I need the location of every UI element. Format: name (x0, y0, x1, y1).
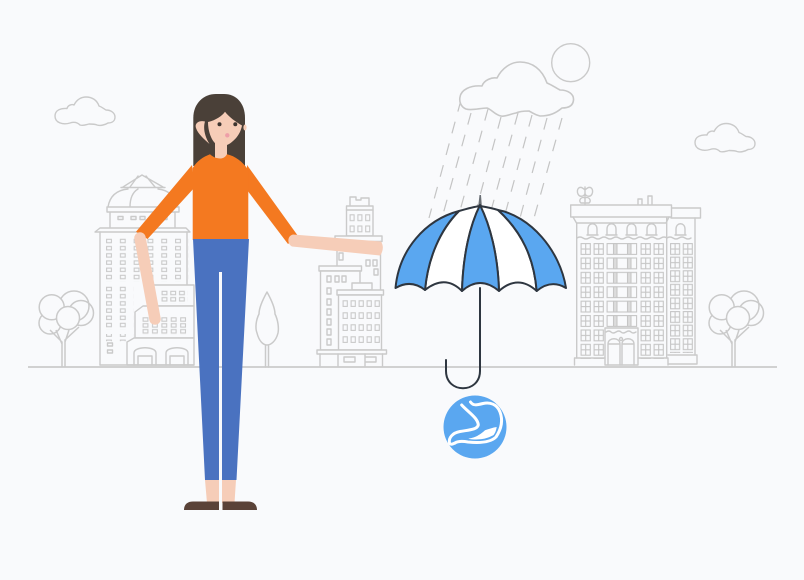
trousers (193, 239, 249, 480)
right upper arm (247, 165, 298, 244)
sweater (193, 154, 248, 240)
arched doors (134, 348, 188, 365)
face (208, 112, 242, 146)
window grids (580, 243, 604, 359)
rain (429, 100, 562, 218)
hair (193, 94, 245, 166)
ear (196, 121, 210, 144)
main tower (95, 228, 190, 232)
right building (571, 187, 700, 365)
handle (446, 288, 480, 388)
left small cloud (55, 97, 115, 125)
entrance (605, 328, 638, 365)
left forearm (140, 238, 155, 319)
dome (107, 175, 179, 227)
umbrella (396, 195, 566, 388)
arched windows (587, 224, 686, 235)
annex (153, 285, 194, 306)
shoes (184, 502, 257, 510)
neck (215, 135, 227, 159)
base (574, 355, 697, 365)
right small cloud (695, 124, 755, 152)
left building (95, 175, 194, 365)
center building (317, 197, 386, 366)
legs (205, 480, 236, 503)
roof ornament (577, 187, 593, 205)
left tree (39, 291, 94, 367)
icon: stomach (444, 396, 506, 458)
small poplar tree (256, 292, 278, 367)
right forearm and hand (288, 234, 383, 256)
canopy panels (396, 205, 566, 291)
right tree (709, 291, 764, 367)
tip (478, 195, 482, 208)
person (136, 94, 383, 510)
sun (552, 44, 590, 82)
ground line (28, 366, 777, 368)
left upper arm (136, 165, 195, 239)
nose (225, 133, 230, 138)
eyes (218, 122, 222, 126)
rain cloud (460, 62, 574, 116)
small right ear (243, 124, 247, 130)
